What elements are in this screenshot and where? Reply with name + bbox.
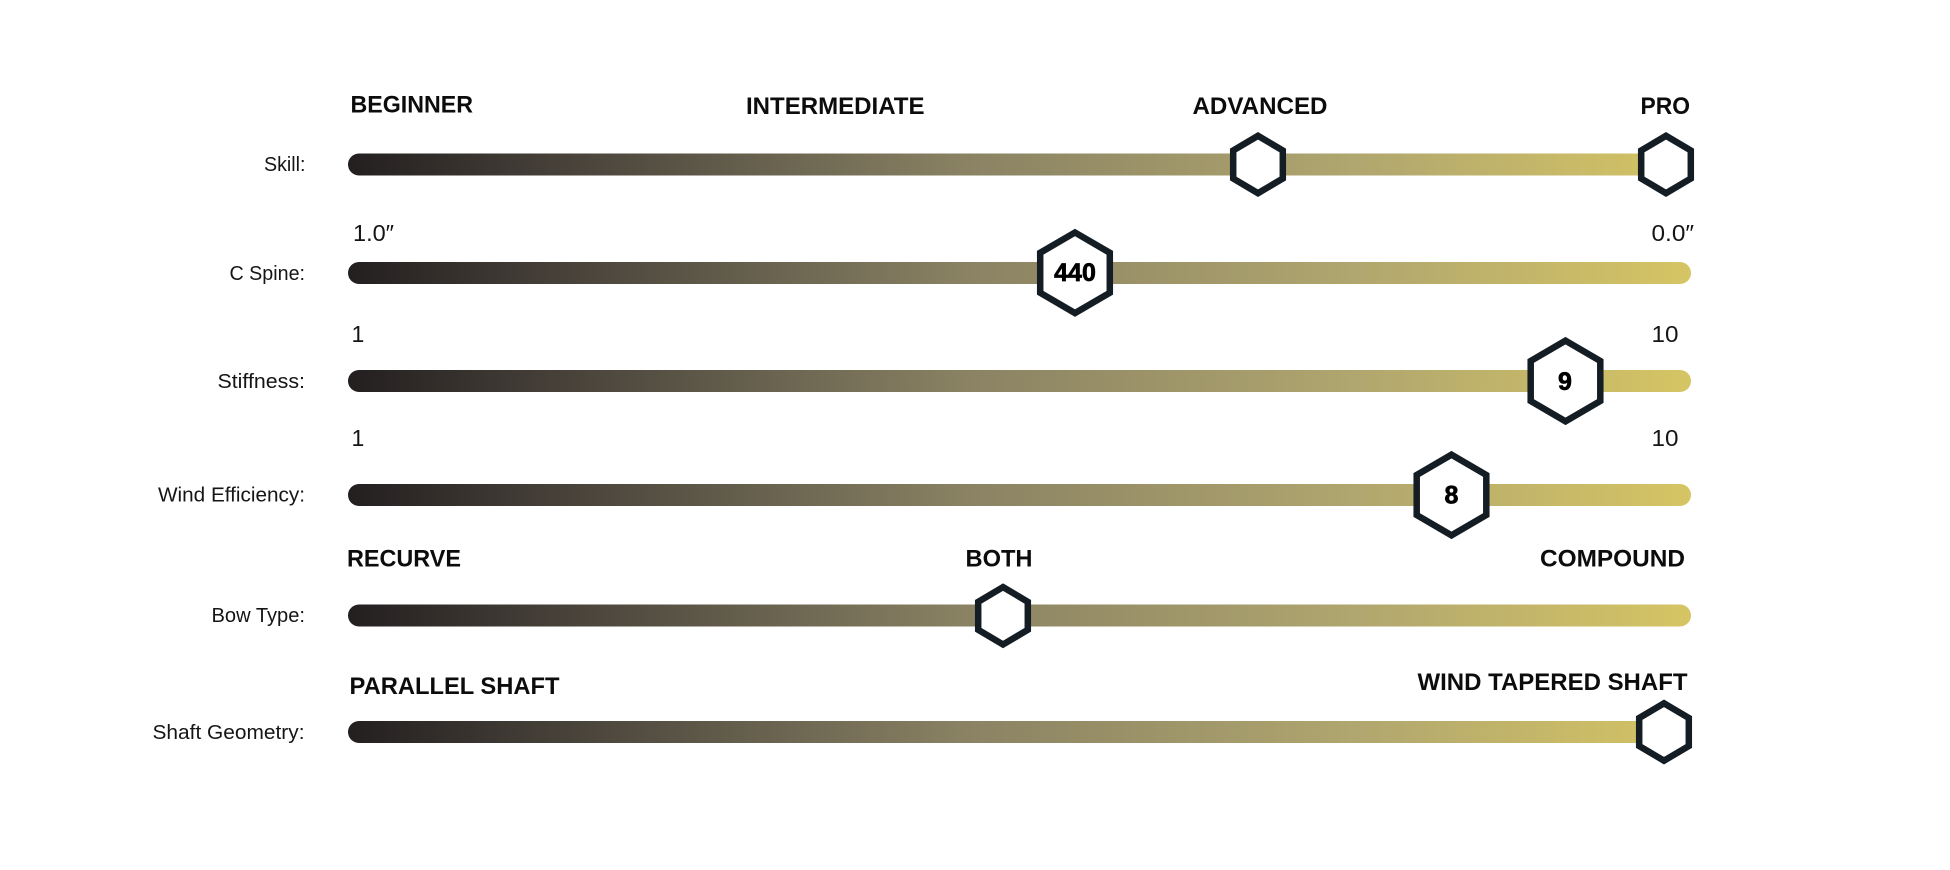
row: shaft geometry xyxy=(152,669,1691,761)
scale end: 10: 10 xyxy=(1652,425,1678,451)
label: wind efficiency: Wind Efficiency: xyxy=(158,485,305,507)
scale label: both: BOTH xyxy=(966,546,1032,573)
scale end: 0.0 inch: 0.0″ xyxy=(1652,220,1694,246)
row: c spine xyxy=(230,220,1694,313)
scale end: 10: 10 xyxy=(1652,321,1678,347)
marker: 440 hexagon: 440 xyxy=(1054,259,1096,287)
label: bow type: Bow Type: xyxy=(212,605,305,627)
row: skill xyxy=(264,92,1691,193)
marker: both hexagon xyxy=(978,587,1028,644)
gradient bar: stiffness xyxy=(348,370,1691,392)
marker: 8 hexagon xyxy=(1417,455,1486,535)
label: skill: Skill: xyxy=(264,154,306,176)
scale start: 1.0 inch: 1.0″ xyxy=(353,220,394,246)
gradient bar: skill xyxy=(348,154,1691,176)
scale label: recurve: RECURVE xyxy=(347,546,461,573)
marker: wind tapered hexagon xyxy=(1639,703,1689,761)
scale label: intermediate: INTERMEDIATE xyxy=(746,93,924,120)
scale start: 1: 1 xyxy=(352,321,364,347)
scale label: compound: COMPOUND xyxy=(1540,546,1685,573)
marker: 8 hexagon: 8 xyxy=(1445,482,1459,510)
scale label: beginner: BEGINNER xyxy=(350,92,473,119)
marker: advanced hexagon xyxy=(1233,136,1283,193)
scale start: 1: 1 xyxy=(352,425,364,451)
scale label: advanced: ADVANCED xyxy=(1192,93,1328,120)
marker: pro hexagon xyxy=(1641,136,1691,193)
label: c spine: C Spine: xyxy=(230,263,305,285)
gradient bar: bow type xyxy=(348,604,1691,626)
gradient bar: wind efficiency xyxy=(348,484,1691,506)
gradient bar: c spine xyxy=(348,262,1691,284)
gradient bar: shaft geometry xyxy=(348,721,1691,743)
label: shaft geometry: Shaft Geometry: xyxy=(152,722,304,744)
row: bow type xyxy=(212,546,1691,644)
row: stiffness xyxy=(218,321,1691,421)
row: wind efficiency xyxy=(158,425,1691,535)
scale label: wind tapered shaft: WIND TAPERED SHAFT xyxy=(1418,669,1688,696)
marker: 9 hexagon: 9 xyxy=(1558,368,1572,396)
marker: 440 hexagon xyxy=(1040,232,1110,313)
scale label: pro: PRO xyxy=(1640,93,1690,120)
scale label: parallel shaft: PARALLEL SHAFT xyxy=(350,673,560,700)
marker: 9 hexagon xyxy=(1531,341,1600,421)
label: stiffness: Stiffness: xyxy=(218,371,305,393)
